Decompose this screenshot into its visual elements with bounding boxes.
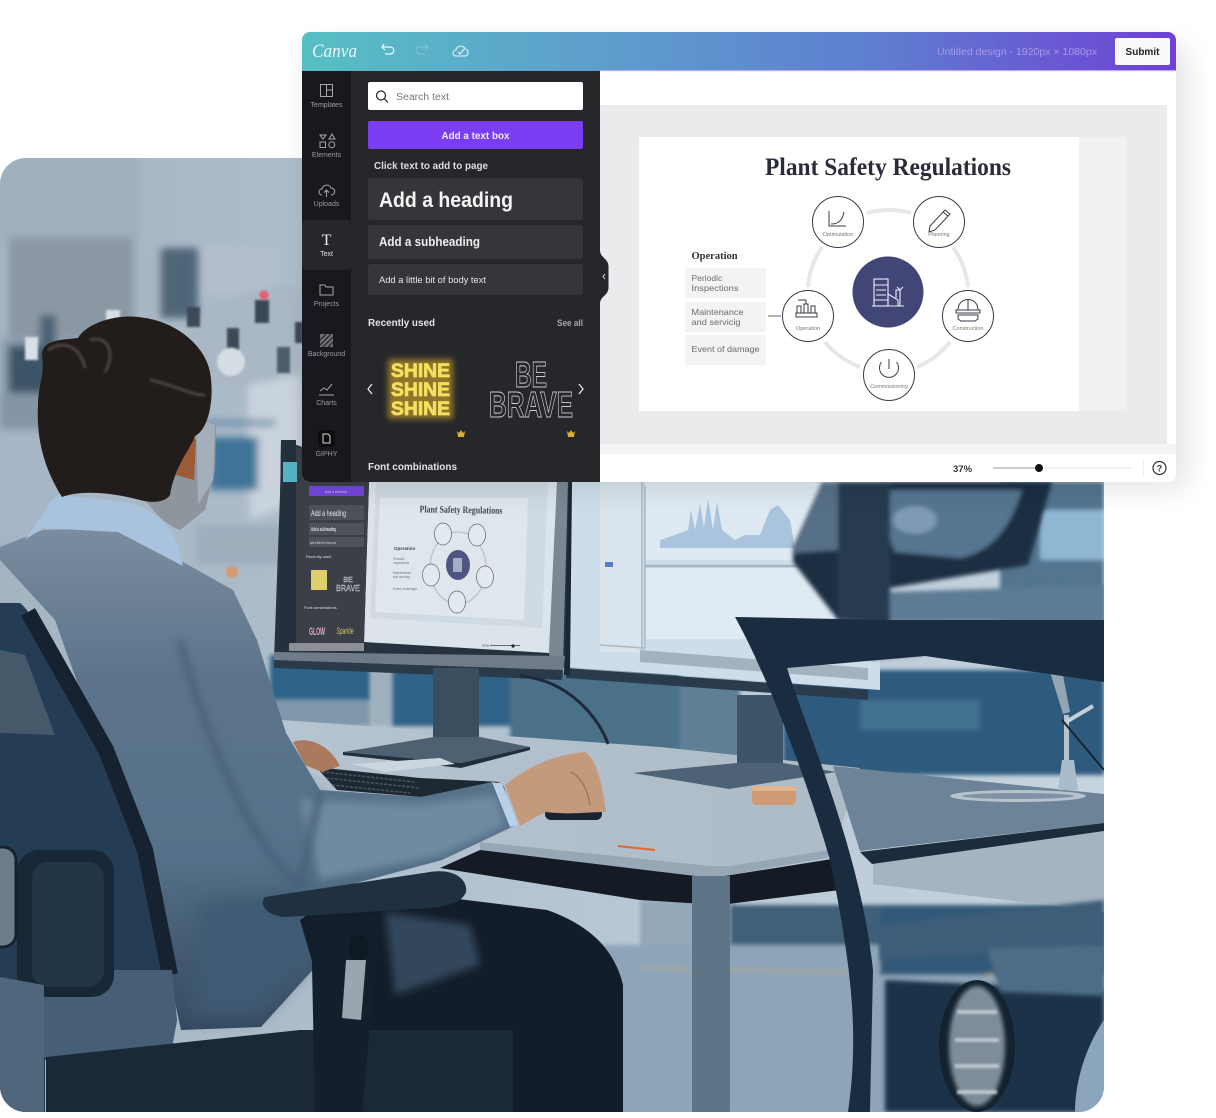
bottom bar: ? bbox=[1157, 464, 1162, 474]
template: BE BRAVE bbox=[489, 354, 573, 425]
crowns bbox=[457, 430, 575, 437]
cables bbox=[520, 676, 608, 744]
center icon: factory bbox=[852, 256, 924, 328]
nav: Text: Text bbox=[320, 251, 333, 258]
hands bbox=[293, 740, 606, 826]
nav: GIPHY: GIPHY bbox=[316, 451, 338, 458]
template: BE BRAVE: BE bbox=[515, 354, 547, 395]
operation list: Operation bbox=[692, 251, 738, 262]
nav: Text bbox=[320, 234, 333, 256]
top toolbar bbox=[302, 32, 1176, 71]
operation list: and servicig bbox=[692, 317, 741, 327]
mini Canva screen: Plant Safety Regulations bbox=[419, 504, 503, 517]
nav: Background bbox=[308, 334, 345, 358]
operation list: Event of damage bbox=[692, 344, 760, 354]
left navigation rail bbox=[302, 71, 351, 482]
nav: Elements bbox=[312, 134, 342, 159]
Canva logo: Canva bbox=[312, 41, 357, 62]
canvas workspace bbox=[600, 105, 1167, 444]
chart on right monitor bbox=[660, 499, 795, 548]
sweater bbox=[0, 528, 514, 1030]
step: Optimization: Optimization bbox=[823, 232, 853, 238]
design page: Plant Safety Regulations bbox=[639, 137, 1079, 411]
add a subheading: Add a subheading bbox=[379, 235, 480, 249]
shirt cuff bbox=[492, 782, 518, 827]
mini Canva screen bbox=[278, 440, 557, 653]
step: Construction: Construction bbox=[953, 326, 983, 332]
operation list: Inspections bbox=[692, 283, 738, 293]
step: Commissioning: Commissioning bbox=[870, 384, 908, 390]
mini Canva screen: Maintenance bbox=[393, 571, 411, 575]
step: Operation: Operation bbox=[796, 326, 820, 332]
left monitor bbox=[274, 440, 608, 768]
nav: Text: T bbox=[322, 232, 332, 249]
step: Operation bbox=[782, 290, 834, 342]
see all: See all bbox=[557, 318, 583, 328]
mini Canva screen: BE bbox=[343, 577, 353, 584]
template: BE BRAVE: BRAVE bbox=[489, 384, 573, 425]
document title: Untitled design - 1920px × 1080px bbox=[937, 47, 1097, 58]
right monitor bbox=[564, 482, 880, 789]
nav: Projects: Projects bbox=[314, 301, 340, 308]
paper on desk bbox=[352, 758, 455, 772]
click text label: Click text to add to page bbox=[374, 161, 488, 172]
bottom bar bbox=[600, 454, 1176, 482]
keyboard bbox=[316, 767, 501, 797]
mini Canva screen: Add a little bit of body text bbox=[310, 540, 336, 545]
collar bbox=[25, 495, 183, 566]
hair bbox=[38, 316, 212, 502]
step: Optimization bbox=[812, 196, 864, 248]
trousers and seat bbox=[300, 897, 623, 1112]
mini Canva screen: Inspections bbox=[393, 561, 410, 565]
mini Canva screen: Add a heading bbox=[311, 509, 346, 518]
nav: Charts bbox=[316, 384, 337, 407]
template: SHINE: SHINE bbox=[391, 380, 450, 401]
operation list bbox=[685, 251, 766, 365]
icon: redo bbox=[416, 44, 428, 54]
mouse bbox=[545, 812, 602, 820]
operation list: Maintenance bbox=[692, 307, 744, 317]
mini Canva screen: Font combinations bbox=[304, 605, 337, 610]
submit button: Submit bbox=[1126, 47, 1160, 58]
template: SHINE: SHINE bbox=[391, 399, 450, 420]
step: Construction bbox=[942, 290, 994, 342]
step: Planning bbox=[914, 196, 964, 248]
panel collapse tab bbox=[600, 250, 608, 304]
step: Commissioning bbox=[864, 350, 914, 400]
nav: Templates bbox=[311, 84, 343, 109]
desk lamp bbox=[950, 670, 1104, 802]
template: SHINE: SHINE bbox=[391, 361, 450, 382]
submit button bbox=[1115, 38, 1170, 65]
arrows bbox=[368, 384, 583, 394]
nav: Uploads bbox=[314, 185, 340, 208]
add a heading bbox=[368, 178, 583, 220]
main desk bbox=[282, 720, 1104, 1116]
step: Planning: Planning bbox=[928, 232, 950, 238]
nav: GIPHY bbox=[316, 430, 338, 458]
search box: Search text bbox=[396, 92, 449, 103]
photo background: factory bbox=[0, 158, 1110, 1115]
mini Canva screen: Periodic bbox=[393, 557, 405, 561]
connector line bbox=[768, 315, 781, 317]
add a heading: Add a heading bbox=[379, 189, 513, 212]
recently used: Recently used bbox=[368, 318, 435, 329]
copper ring on desk bbox=[752, 786, 796, 805]
office chair bbox=[0, 603, 623, 1112]
mini Canva screen: BRAVE bbox=[336, 584, 360, 593]
mini Canva screen: 37% bbox=[482, 644, 489, 648]
text panel bbox=[351, 71, 600, 482]
operation list: Periodic bbox=[692, 273, 723, 283]
add a subheading bbox=[368, 225, 583, 259]
mini Canva screen: Recently used bbox=[306, 554, 331, 559]
nav: Charts: Charts bbox=[316, 400, 337, 407]
man: sweater, shirt, head bbox=[0, 316, 518, 1030]
far background below monitors bbox=[270, 482, 1110, 1115]
mini Canva screen: Add a text box bbox=[325, 490, 347, 494]
icon: undo bbox=[382, 44, 394, 54]
nav: Uploads: Uploads bbox=[314, 201, 340, 208]
mini Canva screen: Event of damage bbox=[393, 587, 417, 591]
Canva editor window shadow bbox=[308, 44, 1188, 490]
photo: man working at dual monitors bbox=[0, 158, 1110, 1116]
add a text box button: Add a text box bbox=[442, 131, 510, 142]
foreground chair, right bbox=[735, 482, 1104, 1112]
add body text bbox=[368, 264, 583, 295]
mini Canva screen: GLOW bbox=[309, 626, 325, 638]
nav: Background: Background bbox=[308, 351, 345, 358]
mini Canva screen: Add a subheading bbox=[311, 527, 336, 533]
add body text: Add a little bit of body text bbox=[379, 275, 486, 286]
armrest bbox=[263, 871, 466, 917]
template: SHINE bbox=[388, 359, 453, 420]
nav: Projects bbox=[314, 285, 340, 308]
icon: cloud saved bbox=[453, 46, 468, 56]
bottom bar: 37% bbox=[953, 464, 973, 475]
nav: Elements: Elements bbox=[312, 152, 342, 159]
ring connectors bbox=[808, 210, 968, 367]
font combinations: Font combinations bbox=[368, 462, 457, 473]
Canva editor window bbox=[302, 32, 1176, 482]
mini Canva screen: Sparkle bbox=[336, 626, 354, 636]
nav: Templates: Templates bbox=[311, 102, 343, 109]
mini Canva screen: Operation bbox=[394, 546, 416, 551]
search box bbox=[368, 82, 583, 110]
neck and face bbox=[140, 420, 216, 530]
mini Canva screen: and servicig bbox=[393, 575, 410, 579]
slide title: Plant Safety Regulations bbox=[765, 154, 1011, 181]
add a text box button bbox=[368, 121, 583, 149]
